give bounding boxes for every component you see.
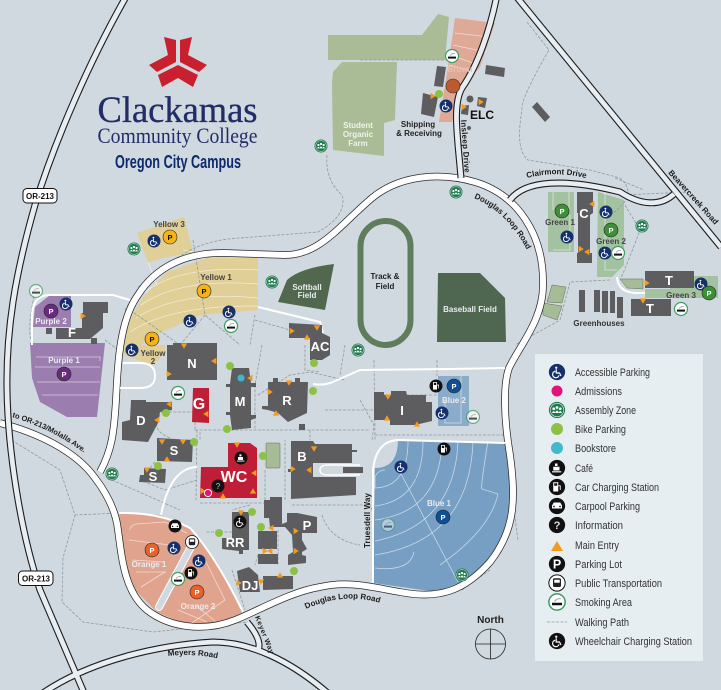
service drives: [32, 277, 645, 612]
parking lot labels: Green 1: [545, 218, 575, 227]
building F: [56, 302, 108, 339]
legend labels: Walking Path: [575, 617, 629, 629]
parking markers: P letters: P: [608, 226, 614, 235]
legend icons: P: [553, 557, 561, 571]
road labels: Meyers Road: [168, 650, 218, 658]
highway badge: lower OR-213: [18, 571, 53, 586]
parking markers: yellow: [145, 230, 211, 346]
road labels: Insleep Drive: [459, 120, 472, 174]
outbuildings: [532, 102, 550, 122]
highway badge: upper OR-213: OR-213: [26, 192, 55, 201]
road: Douglas Loop Road: [0, 177, 543, 627]
parking lot labels: Purple 2: [35, 317, 67, 326]
building RR: [222, 512, 249, 554]
legend labels: [575, 367, 692, 648]
field and area labels: Farm: [348, 139, 368, 148]
field and area labels: Organic: [343, 130, 374, 139]
building labels: S: [149, 469, 158, 484]
field and area labels: Greenhouses: [573, 319, 625, 328]
building labels: I: [400, 403, 404, 418]
parking lot labels: Yellow 3: [153, 220, 185, 229]
parking markers: P letters: P: [451, 382, 457, 391]
building labels: M: [235, 394, 245, 409]
legend labels: Café: [575, 463, 593, 475]
parking markers: P letters: P: [706, 289, 712, 298]
building S lower: [139, 468, 166, 483]
field and area labels: [292, 65, 625, 328]
building C: [577, 192, 593, 263]
building labels: B: [297, 449, 307, 464]
track and field: [360, 221, 410, 345]
parking lot labels: Green 2: [596, 237, 626, 246]
building D: [122, 400, 172, 442]
field and area labels: Brown: [448, 65, 473, 74]
building labels: AC: [311, 339, 330, 354]
legend labels: Bike Parking: [575, 424, 626, 436]
parking lot labels: Blue 2: [442, 396, 467, 405]
road labels: Douglas Loop Road: [304, 594, 381, 609]
softball field: [278, 264, 334, 310]
building labels: WC: [221, 469, 248, 486]
legend labels: Assembly Zone: [575, 405, 636, 417]
student organic farm: [332, 62, 397, 156]
legend labels: Public Transportation: [575, 578, 662, 590]
building labels: D: [136, 413, 146, 428]
field and area labels: Track &: [371, 272, 400, 281]
parking lot labels: Purple 1: [48, 356, 80, 365]
building labels: P: [303, 518, 312, 533]
highway badge: upper OR-213: [23, 188, 57, 203]
building S upper: [157, 438, 193, 462]
building N: [167, 343, 217, 380]
road labels: Keyer Way: [253, 615, 275, 655]
parking lot: Orange: [119, 513, 243, 627]
legend labels: Wheelchair Charging Station: [575, 636, 692, 648]
legend labels: Information: [575, 520, 623, 532]
parking lot: Blue 2: [438, 376, 469, 426]
building labels: DJ: [242, 578, 258, 593]
parking markers: other lots: [44, 204, 716, 599]
building WC: [200, 443, 257, 498]
building G: [192, 388, 209, 423]
field and area labels: Baseball Field: [443, 305, 497, 314]
campus name: Oregon City Campus: [115, 152, 241, 172]
road labels: Clairmont Drive: [526, 169, 586, 178]
building labels: [68, 206, 673, 593]
service markers: ?: [216, 482, 221, 491]
road labels: Beavercreek Road: [667, 168, 720, 226]
parking markers: P letters: P: [149, 546, 155, 555]
main entries: [81, 93, 650, 586]
building labels: F: [68, 325, 76, 340]
legend labels: Smoking Area: [575, 597, 633, 609]
parking markers: P letters yellow: P: [201, 287, 207, 296]
legend labels: Carpool Parking: [575, 501, 640, 513]
building labels: S: [170, 443, 179, 458]
parking markers: P letters: P: [440, 513, 446, 522]
service markers: [168, 380, 450, 580]
legend labels: Bookstore: [575, 443, 616, 455]
building labels: RR: [226, 535, 245, 550]
road labels: Douglas Loop Road: [474, 193, 532, 250]
parking markers: P letters: P: [61, 370, 67, 379]
parking lot labels: 2: [151, 357, 156, 366]
field and area labels: Field: [376, 282, 394, 291]
building T lower: [631, 299, 671, 316]
baseball field: [437, 273, 506, 342]
logo wordmark: Clackamas: [98, 90, 258, 131]
shipping and receiving: [421, 93, 438, 117]
smoking areas: [30, 50, 688, 586]
legend labels: Admissions: [575, 386, 622, 398]
field and area labels: Shipping: [401, 120, 435, 129]
parking lot labels: Yellow 1: [200, 273, 232, 282]
building labels: T: [665, 273, 673, 288]
parking markers: P letters: P: [48, 307, 54, 316]
bike parking: [154, 90, 443, 575]
building I: [374, 391, 432, 425]
building labels: C: [579, 206, 589, 221]
ELC buildings: [461, 96, 487, 130]
parking markers: P letters yellow: P: [167, 233, 173, 242]
legend labels: Accessible Parking: [575, 367, 650, 379]
field and area labels: & Receiving: [396, 129, 442, 138]
assembly zones: [106, 140, 648, 582]
building P: [264, 497, 317, 565]
legend labels: Parking Lot: [575, 559, 622, 571]
farm fields: [328, 14, 449, 156]
building labels: R: [282, 393, 292, 408]
parking lot: Blue 1: [373, 440, 512, 592]
logo: [98, 37, 258, 172]
parking lot labels: Orange 2: [181, 602, 216, 611]
building labels: G: [193, 396, 205, 413]
highway badge: lower OR-213: OR-213: [22, 574, 51, 584]
parking markers: P letters: [48, 207, 712, 597]
field and area labels: Field: [298, 291, 316, 300]
panel: legend: [535, 354, 703, 661]
compass: North: [477, 615, 504, 626]
parking lot labels: [35, 218, 696, 611]
accessible parking markers: [60, 100, 708, 568]
parking lot: Brown: [439, 18, 495, 122]
legend icons: ?: [554, 520, 561, 532]
parking lot labels: Blue 1: [427, 499, 452, 508]
building labels: T: [646, 301, 654, 316]
compass: [476, 615, 506, 659]
parking lots: Green: [548, 192, 718, 298]
parking markers: P letters yellow: [149, 233, 207, 344]
field and area labels: Softball: [292, 283, 322, 292]
building labels: N: [187, 356, 197, 371]
parking lot labels: Orange 1: [132, 560, 167, 569]
building M: [226, 368, 256, 430]
parking lot: Purple: [30, 295, 105, 417]
building B: [288, 441, 357, 499]
bookstore: [238, 374, 244, 382]
parking markers: P letters: P: [194, 588, 200, 597]
building DJ: [237, 567, 260, 592]
legend labels: Car Charging Station: [575, 482, 659, 494]
parking markers: P letters yellow: P: [149, 335, 155, 344]
building T upper: [645, 271, 694, 288]
parking lot labels: Green 3: [666, 291, 696, 300]
field and area labels: ELC: [470, 108, 494, 122]
building R: [262, 378, 308, 422]
admissions: [204, 489, 212, 497]
parking lot: Yellow: [123, 217, 258, 365]
parking markers: P letters: P: [559, 207, 565, 216]
brown lot marker: [446, 79, 460, 93]
legend labels: Main Entry: [575, 540, 619, 552]
logo: Community College: [98, 123, 258, 148]
building AC: [289, 323, 330, 360]
greenhouses: [579, 290, 623, 318]
road labels: to OR-213/Molalla Ave.: [12, 412, 84, 452]
road labels: [12, 120, 720, 658]
road labels: Truesdell Way: [363, 492, 372, 548]
field and area labels: Student: [343, 121, 373, 130]
parking lot labels: Yellow: [141, 349, 166, 358]
logo mark: [149, 37, 207, 87]
transit walkway: [159, 545, 192, 607]
legend icons: [547, 364, 567, 649]
buildings: [46, 65, 694, 592]
